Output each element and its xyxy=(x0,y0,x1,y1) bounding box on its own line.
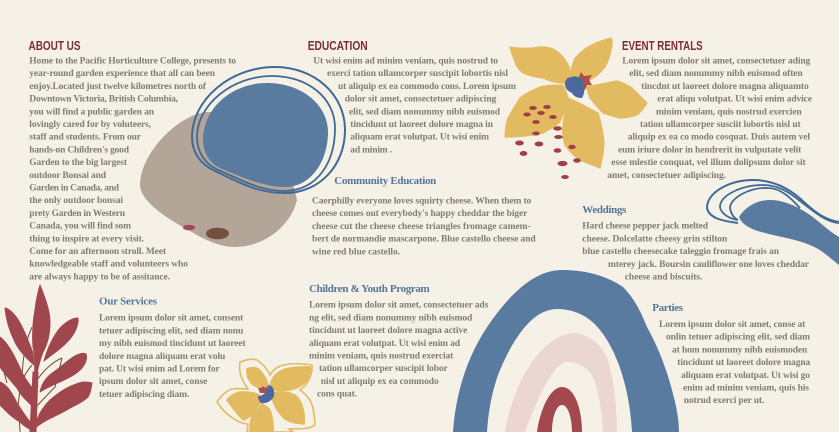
text: About Us body: Home to the Pacific Horticulture College, presents to xyxy=(29,56,236,66)
text: Event Rentals body: Lorem ipsum dolor sit amet, consectetuer ading xyxy=(622,56,811,66)
heading: Event Rentals: EVENT RENTALS xyxy=(622,38,703,53)
text: Weddings body xyxy=(582,222,810,282)
text: Event Rentals body: erat aliqu volutpat. Ut wisi enim advice xyxy=(657,95,812,105)
text: Event Rentals body: tincdnt ut laoreet dolore magna aliquamto xyxy=(641,82,809,92)
text: About Us body: Canada, you will find som xyxy=(29,222,131,232)
text: About Us body: thing to inspire at every visit. xyxy=(29,234,144,244)
text: Parties body: onlin tetuer adipiscing elit, sed diam xyxy=(666,333,810,343)
text: Event Rentals body xyxy=(607,56,812,181)
text: Education body: aliquam erat volutpat. Ut wisi enim xyxy=(350,133,489,143)
heading: Education: EDUCATION xyxy=(308,38,368,53)
text: About Us body: Garden to the big largest xyxy=(29,158,128,168)
red leaf plant xyxy=(0,285,92,432)
rainbow illustration xyxy=(453,270,679,432)
text: Weddings body: Hard cheese pepper jack melted xyxy=(582,222,709,232)
subheading: Community Education: Community Education xyxy=(334,175,436,187)
text: About Us body: you will find a public garden an xyxy=(29,107,155,117)
text: Parties body: notrud exerci per ut. xyxy=(684,396,764,406)
text: Our Services body: dolore magna aliquam erat volu xyxy=(99,352,226,362)
subheading: Parties: Parties xyxy=(652,302,684,314)
text: About Us body: the only outdoor bonsai xyxy=(29,196,123,206)
text: About Us body: prety Garden in Western xyxy=(29,209,126,219)
text: Children & Youth Program body: minim veniam, quis nostrud exerciat xyxy=(309,352,454,362)
text: Community Education body: cheese comes out everybody's happy cheddar the biger xyxy=(312,209,528,219)
text: Children & Youth Program body: aliquam erat volutpat. Ut wisi enim ad xyxy=(309,339,461,349)
text: Community Education body: bert de normandie mascarpone. Blue castello cheese and xyxy=(312,235,536,245)
text: Our Services body: my nibh euismod tincidunt ut laoreet xyxy=(99,339,247,349)
text: Children & Youth Program body: tation ullamcorper suscipit lobor xyxy=(319,364,448,374)
text: Education body: ut aliquip ex ea commodo cons. Lorem ipsum xyxy=(338,82,516,92)
text: About Us body: staff and students. From our xyxy=(29,133,142,143)
text: About Us body: are always happy to be of assitance. xyxy=(29,272,170,282)
text: Our Services body: pat. Ut wisi enim ad Lorem for xyxy=(99,364,220,374)
text: Parties body: at hom nonummy nibh euismoden xyxy=(672,345,808,355)
text: Education body: exerci tation ullamcorper suscipit lobortis nisl xyxy=(327,69,508,79)
text: Our Services body: tetuer adipiscing diam. xyxy=(99,390,189,400)
text: Weddings body: mterey jack. Boursin cauliflower one loves cheddar xyxy=(608,260,810,270)
heading: About Us: ABOUT US xyxy=(28,38,81,53)
text: About Us body: lovingly cared for by voluteers, xyxy=(29,120,152,130)
text: Education body xyxy=(313,56,516,155)
text: Children & Youth Program body: ng elit, sed diam nonummy nibh euismod xyxy=(309,313,473,323)
text: About Us body: outdoor Bonsai and xyxy=(29,171,107,181)
text: Event Rentals body: minim veniam, quis nostrud exercien xyxy=(656,107,802,117)
text: Weddings body: blue castello cheesecake taleggio fromage frais an xyxy=(582,247,780,257)
text: Event Rentals body: esse mlestie conquat, vel illum dolipsum dolor sit xyxy=(611,158,807,168)
blue swirl top right xyxy=(707,180,839,265)
text: Education body: tincidunt ut laoreet dolore magna in xyxy=(350,120,494,130)
text: Parties body: Lorem ipsum dolor sit amet, conse at xyxy=(659,320,806,330)
text: Our Services body xyxy=(99,314,247,400)
text: Parties body: tincidunt ut laoreet dolore magna xyxy=(677,358,811,368)
text: Our Services body: tetuer adipiscing elit, sed diam nonu xyxy=(99,326,244,336)
text: About Us body: year-round garden experience that all can been xyxy=(29,69,216,79)
text: Children & Youth Program body: cons quat. xyxy=(317,390,357,400)
text: Children & Youth Program body: tincidunt ut laoreet dolore magna active xyxy=(309,326,467,336)
flower centre small xyxy=(258,385,274,403)
text: Event Rentals body: tation ullamcorper susciit lobortis nisl ut xyxy=(640,120,802,130)
text: Children & Youth Program body: Lorem ipsum dolor sit amet, consectetuer ads xyxy=(309,301,489,311)
text: About Us body: hands-on Children's good xyxy=(29,145,130,155)
text: Community Education body: wine red blue castello. xyxy=(312,247,400,257)
text: Weddings body: cheese. Dolcelatte cheesy grin stilton xyxy=(582,234,728,244)
text: Community Education body: cheese cut the cheese cheese triangles fromage camem- xyxy=(312,222,531,232)
text: Event Rentals body: eum iriure dolor in hendrerit in vulputate velit xyxy=(618,145,802,155)
text: Our Services body: Lorem ipsum dolor sit amet, consent xyxy=(99,314,244,324)
flower centre xyxy=(565,72,592,98)
text: Education body: ad minim . xyxy=(350,145,392,155)
text: About Us body: knowledgeable staff and volunteers who xyxy=(29,260,188,270)
text: Event Rentals body: amet, consectetuer adipiscing. xyxy=(607,171,726,181)
text: About Us body: Garden in Canada, and xyxy=(29,184,120,194)
text: Parties body: enim ad minim veniam, quis his xyxy=(683,384,809,394)
text: Community Education body: Caerphilly everyone loves squirty cheese. When them to xyxy=(312,196,532,206)
text: About Us body: Downtown Victoria, British Columbia, xyxy=(29,95,179,105)
text: Children & Youth Program body xyxy=(309,301,489,400)
text: Parties body: aliquam erat volutpat. Ut wisi go xyxy=(681,371,810,381)
text: Our Services body: ipsum dolor sit amet, conse xyxy=(99,377,207,387)
text: Event Rentals body: elit, sed diam nonummy nibh euismod often xyxy=(629,69,803,79)
text: Event Rentals body: aliquip ex ea co modo cosquat. Duis autem vel xyxy=(628,133,810,143)
red seeds xyxy=(515,105,581,179)
subheading: Children & Youth Program: Children & Youth Program xyxy=(309,283,430,295)
text: Education body: dolor sit amet, consectetuer adipiscing xyxy=(345,95,497,105)
text: Education body: Ut wisi enim ad minim veniam, quis nostrud to xyxy=(313,56,498,66)
text: Children & Youth Program body: nisl ut aliquip ex ea commodo xyxy=(321,377,439,387)
subheading: Our Services: Our Services xyxy=(99,296,158,308)
text: About Us body: Come for an afternoon stroll. Meet xyxy=(29,247,167,257)
text: Parties body xyxy=(659,320,811,406)
subheading: Weddings: Weddings xyxy=(582,204,627,216)
text: Education body: elit, sed diam nonummy nibh euismod xyxy=(349,107,501,117)
yellow flower illustration xyxy=(505,38,647,179)
text: About Us body: enjoy.Located just twelve kilometres north of xyxy=(29,82,207,92)
text: Weddings body: cheese and biscuits. xyxy=(625,272,702,282)
taupe blob with blue circle and rings xyxy=(140,67,345,247)
text: About Us body xyxy=(29,56,236,282)
small yellow flower xyxy=(217,359,315,432)
text: Community Education body xyxy=(312,196,536,257)
